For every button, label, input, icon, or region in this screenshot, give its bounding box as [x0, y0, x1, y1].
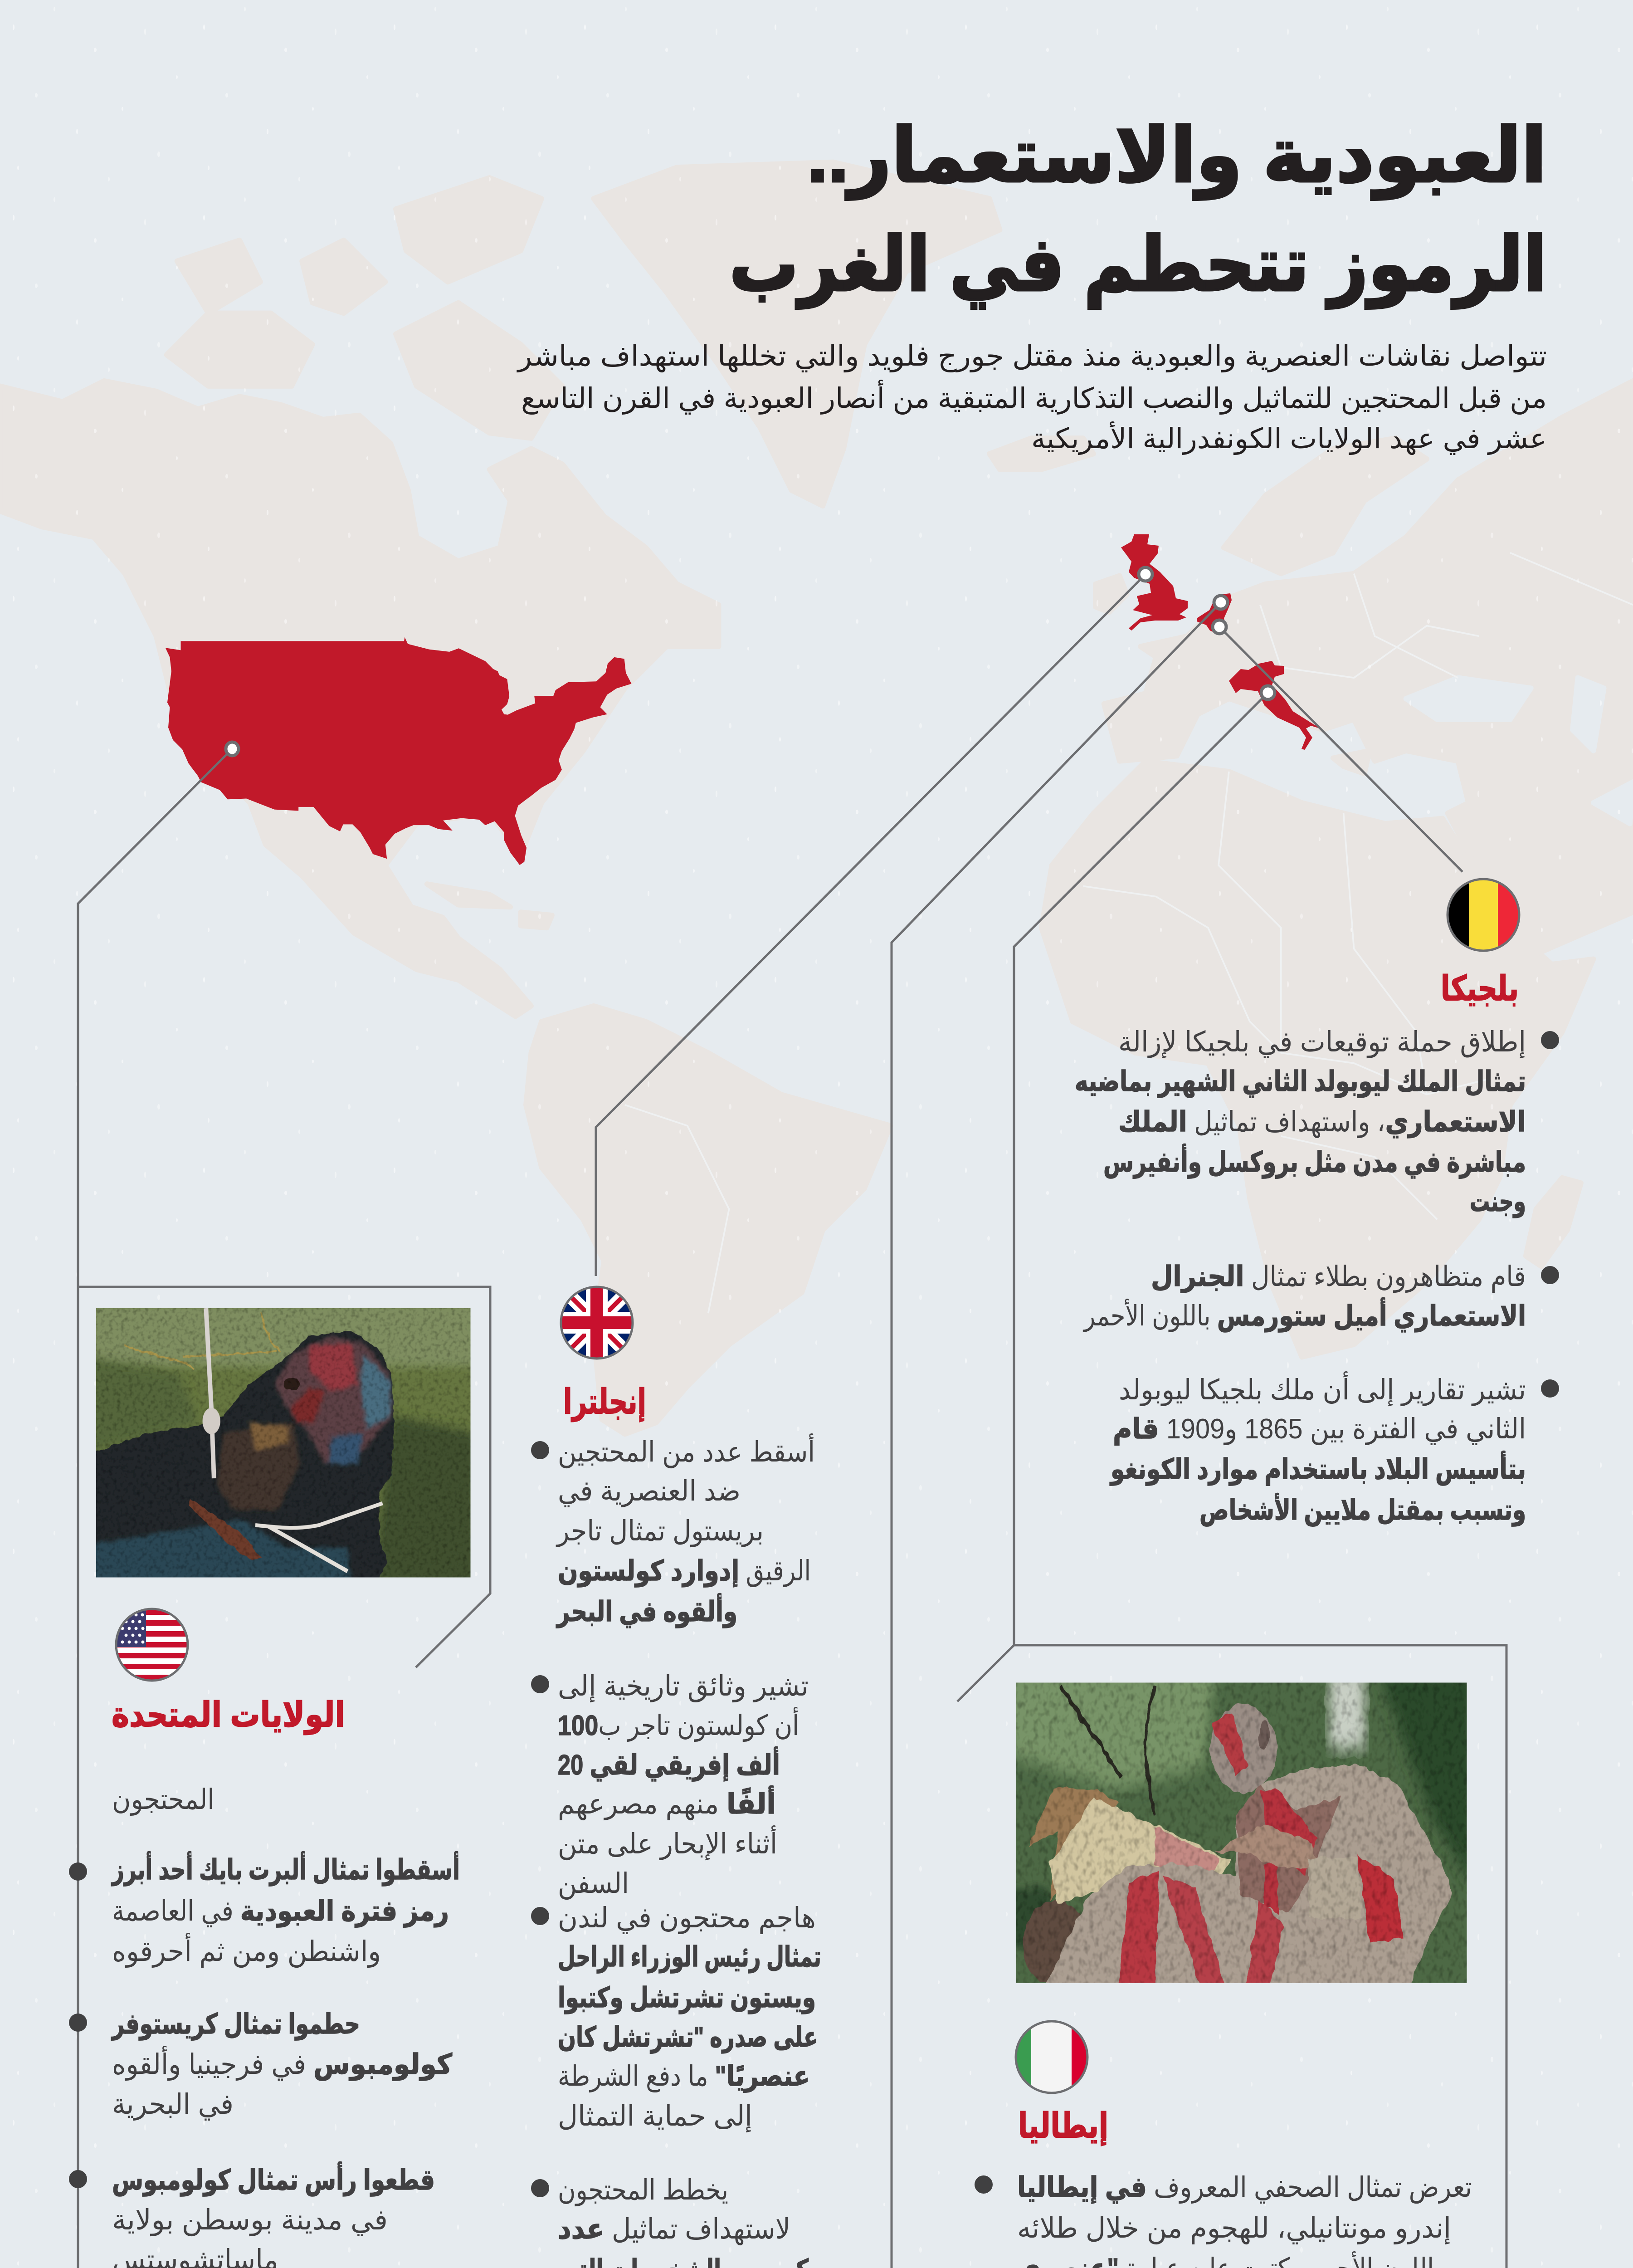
bullet list: United States [69, 1784, 471, 2268]
connector line: Italy [1014, 693, 1268, 1645]
photo: toppled Albert Pike statue [90, 1301, 477, 1584]
bullet list: England: ألفًا منهم مصرعهم [558, 1785, 776, 1821]
bullet list: England: إلى حماية التمثال [558, 2101, 752, 2133]
panel: England [531, 1287, 821, 2268]
bullet list: United States: المحتجون [112, 1784, 214, 1816]
bullet list: England: الرقيق إدوارد كولستون [558, 1555, 811, 1587]
bullet list: England: السفن [558, 1868, 629, 1900]
bullet list: Italy: تعرض تمثال الصحفي المعروف في إيطاليا [1017, 2172, 1472, 2204]
intro paragraph: من قبل المحتجين للتماثيل والنصب التذكارية المتبقية من أنصار العبودية في القرن التاسع [521, 380, 1547, 415]
intro paragraph: تتواصل نقاشات العنصرية والعبودية منذ مقتل جورج فلويد والتي تخللها استهداف مباشر [517, 341, 1547, 373]
bullet list: England: تمثال رئيس الوزراء الراحل [558, 1941, 821, 1973]
bullet list: England: أسقط عدد من المحتجين [558, 1433, 815, 1468]
bullet list: England: يخطط المحتجون [558, 2175, 728, 2206]
panel: Belgium [1075, 879, 1559, 1527]
bullet list: Belgium: قام متظاهرون بطلاء تمثال الجنرال [1151, 1261, 1526, 1293]
bullet list: Belgium: وتسبب بمقتل ملايين الأشخاص [1199, 1493, 1526, 1527]
bullet list: Belgium [1075, 1026, 1559, 1527]
bullet list: United States: قطعوا رأس تمثال كولومبوس [112, 2161, 435, 2196]
title [729, 114, 1547, 309]
intro paragraph [517, 341, 1547, 455]
bullet list: United States: واشنطن ومن ثم أحرقوه [112, 1933, 381, 1968]
bullet list: Italy [975, 2172, 1472, 2268]
bullet list: United States: في مدينة بوسطن بولاية [112, 2204, 388, 2236]
map markers [226, 567, 1275, 756]
connector line: Netherlands [892, 602, 1221, 2268]
bullet list: United States: حطموا تمثال كريستوفر [111, 2009, 360, 2040]
bullet list: Belgium: مباشرة في مدن مثل بروكسل وأنفيرس [1103, 1144, 1526, 1178]
map: Netherlands and Belgium [1197, 593, 1232, 635]
heading: Belgium: بلجيكا [1441, 969, 1519, 1008]
heading: England: إنجلترا [563, 1383, 646, 1422]
bullet list: England: لاستهداف تماثيل عدد [558, 2214, 790, 2246]
connector line: Belgium [1219, 627, 1462, 872]
bullet list: United States: رمز فترة العبودية في العاصمة [112, 1896, 449, 1927]
bullet list: England: هاجم محتجون في لندن [558, 1902, 816, 1934]
bullet list: England: ألف إفريقي لقي 20 [558, 1746, 780, 1781]
map: Italy [1229, 661, 1323, 750]
intro paragraph: عشر في عهد الولايات الكونفدرالية الأمريكية [1031, 421, 1547, 455]
bullet list: Belgium: الاستعماري، واستهداف تماثيل الملك [1118, 1106, 1526, 1139]
photo: Montanelli statue in red paint [1008, 1671, 1475, 1995]
bullet list: Belgium: الثاني في الفترة بين 1865 و1909 قام [1113, 1413, 1526, 1446]
bullet list: England: ويستون تشرتشل وكتبوا [558, 1982, 816, 2014]
bullet list: Belgium: وجنت [1470, 1186, 1526, 1218]
icon: Belgian flag [1448, 879, 1520, 951]
bullet list: England: أثناء الإبحار على متن [558, 1825, 777, 1861]
bullet list: England: على صدره "تشرتشل كان [558, 2022, 818, 2053]
title: الرموز تتحطم في الغرب [729, 223, 1547, 309]
title: العبودية والاستعمار.. [807, 114, 1547, 200]
connector line: UK [596, 574, 1146, 1276]
bullet list: England: ضد العنصرية في [558, 1476, 741, 1507]
bullet list: United States: في البحرية [112, 2089, 234, 2121]
bullet list: United States: أسقطوا تمثال ألبرت بايك أحد أبرز [111, 1851, 460, 1886]
panel frame: Italy [957, 1645, 1506, 2268]
heading: United States: الولايات المتحدة [112, 1696, 345, 1735]
highlighted countries on map [166, 534, 1323, 865]
world map background [0, 162, 1633, 1434]
panel frame: United States [78, 1287, 490, 1667]
panel: United States [69, 1287, 490, 2268]
bullet list: England: تشير وثائق تاريخية إلى [558, 1671, 809, 1703]
bullet list: Italy: إندرو مونتانيلي، للهجوم من خلال طلائه [1017, 2213, 1451, 2245]
panel: Italy [957, 1645, 1506, 2268]
map: United Kingdom [1121, 534, 1188, 631]
bullet list: Belgium: تمثال الملك ليوبولد الثاني الشهير بماضيه [1075, 1066, 1526, 1098]
heading: Italy: إيطاليا [1018, 2107, 1108, 2146]
icon: Italian flag [1016, 2021, 1088, 2093]
bullet list: Belgium: إطلاق حملة توقيعات في بلجيكا لإزالة [1118, 1026, 1526, 1059]
map: United States [166, 637, 631, 865]
bullet list: England: أن كولستون تاجر ب100 [558, 1707, 799, 1742]
bullet list: England: بريستول تمثال تاجر [556, 1515, 764, 1547]
bullet list: England: عنصريًا" ما دفع الشرطة [558, 2061, 810, 2092]
icon: US flag [116, 1609, 188, 1681]
icon: UK flag [561, 1287, 633, 1359]
bullet list: England [531, 1433, 821, 2268]
bullet list: Belgium: الاستعماري أميل ستورمس باللون الأحمر [1082, 1297, 1526, 1332]
bullet list: England: وألقوه في البحر [556, 1593, 737, 1628]
connector line: USA [78, 749, 232, 2268]
bullet list: Belgium: بتأسيس البلاد باستخدام موارد الكونغو [1110, 1451, 1526, 1486]
bullet list: United States: كولومبوس في فرجينيا وألقوه [112, 2046, 453, 2081]
bullet list: Belgium: تشير تقارير إلى أن ملك بلجيكا ليوبولد [1119, 1371, 1526, 1407]
